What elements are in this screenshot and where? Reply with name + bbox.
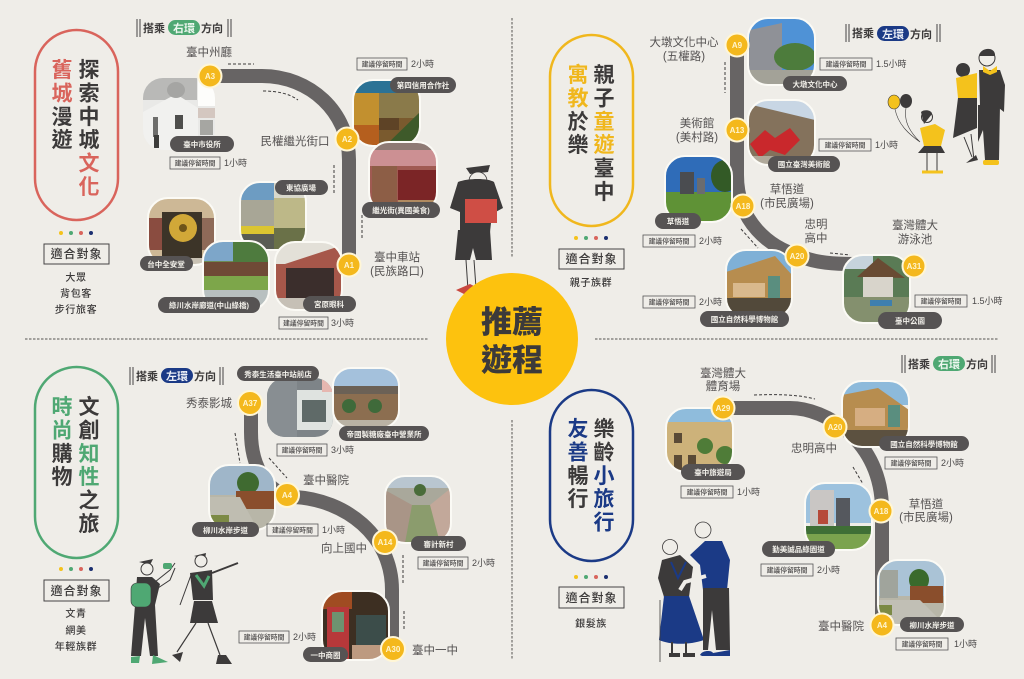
heading pill: 樂齡小旅行 友善暢行: 行 [568,488,588,511]
stay time tags: 2小時 [472,558,495,568]
heading pill: 探索中城文化 舊城漫遊: 城 [52,82,72,105]
stay time tags: 建議停留時間 [687,488,728,496]
station: A18 草悟道 [732,182,814,218]
stay time tags: 建議停留時間 [175,158,216,168]
audience block: 適合對象 [565,251,618,266]
stay time tags: 1小時 [875,140,898,150]
stay time tags: 建議停留時間 [283,318,324,328]
station: A9 大墩文化中心: 大墩文化中心 [650,35,719,49]
stay time tags: 建議停留時間 [921,296,962,306]
direction tag: left loop: 左環 [166,369,188,383]
stay time tags: 建議停留時間 [891,458,932,468]
heading pill: 文創知性之旅 時尚購物: 創 [78,419,100,442]
photo: 第四信用合作社: 第四信用合作社 [397,80,450,90]
center badge: 推薦遊程: 遊程 [481,343,543,378]
audience block [559,575,624,630]
photo: 柳川水岸步道: 柳川水岸步道 [203,525,248,535]
direction tag: right loop [137,19,231,37]
heading pill: 文創知性之旅 時尚購物: 文 [78,395,100,419]
station: A20 忠明高中: A20 [790,252,805,261]
station: A9 大墩文化中心: A9 [732,41,743,50]
photo: 國立臺灣美術館: 國立臺灣美術館 [778,159,831,169]
stay time tags: 2小時 [941,458,964,468]
audience block: 銀髮族 [575,617,607,630]
heading pill: 文創知性之旅 時尚購物: 知 [78,443,100,466]
audience block: 網美 [65,624,87,637]
audience block [559,236,624,289]
station: A13 美術館: (美村路) [676,130,718,144]
photo: 柳川水岸步道: 柳川水岸步道 [910,620,955,630]
heading pill: 親子童遊臺中 寓教於樂: 樂 [568,134,588,157]
route line [235,403,404,649]
station: A18 草悟道: 草悟道 [770,182,805,196]
stay time tags: 1小時 [954,639,977,649]
photo: 宮原眼科 [275,242,356,312]
photo: 臺中市役所 [143,78,234,152]
stay time tags: 建議停留時間 [649,236,690,246]
audience block: 適合對象 [50,246,103,261]
photo: 繼光街: 繼光街(異國美食) [372,205,430,215]
photo: 柳川水岸步道 [878,560,964,632]
heading pill: 樂齡小旅行 友善暢行: 小 [594,465,614,488]
station: A20 忠明高中: A20 [828,423,843,432]
photo: 繼光街 [362,142,440,218]
station: A31 臺灣體大游泳池: 臺灣體大 [892,218,938,232]
stay time tags: 建議停留時間 [282,446,323,454]
station: A1 臺中車站: 臺中車站 [374,250,420,264]
stay time tags [170,58,434,329]
photo: 綠川水岸廊道 [158,241,269,313]
station: A30 臺中一中: A30 [386,645,401,654]
stay time tags [681,457,977,650]
station: A20 忠明高中 [791,416,846,455]
heading pill: 文創知性之旅 時尚購物: 之 [78,489,100,513]
photo: 臺中公園 [843,255,942,329]
station: A13 美術館 [676,116,748,144]
station: A18 草悟道: (市民廣場) [899,510,953,524]
station: A9 大墩文化中心 [650,34,748,63]
photo: 臺中市役所: 臺中市役所 [183,139,221,149]
heading pill: 探索中城文化 舊城漫遊: 中 [78,106,100,129]
photo: 勤美誠品綠園道 [762,483,872,557]
direction tag: left loop: 搭乘 [136,369,158,383]
station: A14 向上國中: 向上國中 [321,541,367,555]
heading pill: 文創知性之旅 時尚購物: 時 [52,396,72,419]
direction tag: left loop: 搭乘 [852,26,874,40]
station: A13 美術館: A13 [730,126,745,135]
station: A2 民權繼光街口: A2 [342,135,353,144]
station: A1 臺中車站: A1 [344,261,355,270]
direction tag: right loop [902,355,995,373]
station: A18 草悟道: A18 [736,202,751,211]
audience block: 步行旅客 [55,303,97,316]
photo: 秀泰生活 [237,366,333,437]
direction tag: right loop: 方向 [201,21,223,35]
illustration: family with balloons [888,49,1005,172]
stay time tags: 2小時 [293,632,316,642]
station: A30 臺中一中 [381,637,458,661]
stay time tags: 3小時 [331,445,354,455]
station: A1 臺中車站: (民族路口) [370,264,424,278]
station: A3 臺中州廳 [186,45,232,88]
heading pill: 樂齡小旅行 友善暢行: 善 [568,441,588,464]
stay time tags: 建議停留時間 [362,60,403,68]
heading pill: 樂齡小旅行 友善暢行: 暢 [568,464,588,488]
audience block [44,567,109,653]
stay time tags: 1小時 [322,525,345,535]
photo: 國立自然科學博物館 [842,381,969,451]
heading pill: 探索中城文化 舊城漫遊 [35,30,118,220]
photo: 柳川水岸步道 [192,465,275,537]
photo: 東協廣場 [240,180,328,250]
stay time tags: 3小時 [331,318,354,328]
photo: 帝國製糖廠: 帝國製糖廠臺中營業所 [346,429,422,439]
direction tag: right loop: 搭乘 [908,357,930,371]
heading pill: 樂齡小旅行 友善暢行 [550,390,633,561]
audience block: 適合對象 [50,583,103,598]
photo: 國立自然科學博物館: 國立自然科學博物館 [711,314,779,324]
station: A31 臺灣體大游泳池: A31 [907,262,922,271]
photo: 臺中旅遊局: 臺中旅遊局 [694,467,732,477]
stay time tags: 1小時 [224,158,247,168]
panel: culture and shopping route [35,366,495,664]
stay time tags: 1.5小時 [876,59,907,69]
stay time tags: 建議停留時間 [244,632,285,642]
stay time tags: 2小時 [411,59,434,69]
audience block: 親子族群 [570,276,612,289]
direction tag: left loop: 左環 [882,27,904,41]
photo: 第四信用合作社 [353,77,456,146]
illustration: two travellers taking photos [131,553,238,664]
heading pill: 探索中城文化 舊城漫遊: 化 [78,176,100,199]
photo: 東協廣場: 東協廣場 [286,182,316,192]
photo: 國立自然科學博物館 [700,250,792,327]
stay time tags [643,58,1003,308]
photo: 草悟道: 草悟道 [667,216,690,226]
heading pill: 樂齡小旅行 友善暢行: 友 [568,418,588,441]
station: A3 臺中州廳: A3 [205,72,216,81]
heading pill: 文創知性之旅 時尚購物: 旅 [78,513,100,536]
photo: 草悟道 [655,156,739,229]
station: A18 草悟道: 草悟道 [909,497,944,511]
stay time tags: 建議停留時間 [423,558,464,568]
station: A9 大墩文化中心: (五權路) [663,49,705,63]
direction tag: right loop: 方向 [966,357,988,371]
station: A3 臺中州廳: 臺中州廳 [186,45,232,59]
station: A18 草悟道: (市民廣場) [760,196,814,210]
station: A29 臺灣體大體育場: 體育場 [706,379,741,393]
heading pill: 親子童遊臺中 寓教於樂: 遊 [594,133,614,157]
station: A29 臺灣體大體育場 [700,366,746,420]
heading pill: 文創知性之旅 時尚購物: 物 [52,466,72,489]
route line [216,64,362,262]
heading pill: 樂齡小旅行 友善暢行: 行 [594,512,614,535]
center badge: 推薦遊程: 推薦 [481,305,543,340]
station: A29 臺灣體大體育場: 臺灣體大 [700,366,746,380]
photo: 審計新村: 審計新村 [424,539,454,549]
heading pill: 探索中城文化 舊城漫遊: 漫 [52,106,72,129]
stay time tags: 2小時 [817,565,840,575]
panel: family route [550,18,1005,329]
station: A37 秀泰影城: A37 [243,399,258,408]
heading pill: 親子童遊臺中 寓教於樂: 親 [594,64,614,87]
photo: 秀泰生活: 秀泰生活臺中站前店 [244,369,312,379]
stay time tags: 建議停留時間 [825,140,866,150]
stay time tags: 建議停留時間 [649,298,690,306]
illustration: man reading map [450,165,503,295]
photo: 帝國製糖廠 [333,368,429,441]
station: A4 臺中醫院: A4 [877,621,888,630]
photo: 一中商圈: 一中商圈 [310,650,340,660]
heading pill: 親子童遊臺中 寓教於樂 [550,35,633,226]
photo: 臺中公園: 臺中公園 [895,316,925,326]
direction tag: left loop: 方向 [910,27,932,41]
stay time tags: 建議停留時間 [272,526,313,534]
station: A20 忠明高中: 忠明高中 [791,441,837,455]
heading pill: 樂齡小旅行 友善暢行: 樂 [594,418,614,441]
heading pill: 文創知性之旅 時尚購物: 尚 [52,419,72,442]
station: A13 美術館: 美術館 [680,116,714,130]
direction tag: right loop: 右環 [938,357,960,371]
heading pill: 探索中城文化 舊城漫遊: 遊 [52,128,72,152]
illustration: elderly couple [658,522,730,662]
audience block: 文青 [65,607,87,620]
heading pill: 文創知性之旅 時尚購物 [35,367,118,558]
station: A4 臺中醫院: A4 [282,491,293,500]
station: A37 秀泰影城 [186,391,262,415]
station: A2 民權繼光街口 [260,128,358,150]
photo: 審計新村 [385,476,466,551]
heading pill: 探索中城文化 舊城漫遊: 城 [78,129,100,152]
heading pill: 文創知性之旅 時尚購物: 性 [78,466,100,489]
heading pill: 親子童遊臺中 寓教於樂: 於 [568,111,588,134]
photo: 大墩文化中心: 大墩文化中心 [792,79,838,89]
direction tag: left loop: 方向 [194,369,216,383]
photo: 宮原眼科: 宮原眼科 [314,299,344,309]
station: A31 臺灣體大游泳池: 游泳池 [898,232,933,246]
center badge: 推薦遊程 [446,273,578,405]
station: A4 臺中醫院 [275,473,349,507]
heading pill: 親子童遊臺中 寓教於樂: 子 [594,87,614,110]
panel: old city route [35,19,503,329]
station: A2 民權繼光街口: 民權繼光街口 [260,134,330,148]
station: A30 臺中一中: 臺中一中 [412,643,458,657]
photo: 大墩文化中心 [748,18,847,91]
direction tag: right loop: 搭乘 [143,21,165,35]
stay time tags: 2小時 [699,236,722,246]
stay time tags: 建議停留時間 [902,640,943,648]
station: A14 向上國中 [321,530,397,555]
station: A20 忠明高中 [786,218,828,268]
direction tag: left loop [130,367,223,385]
station: A4 臺中醫院 [818,614,894,636]
audience block: 適合對象 [565,590,618,605]
route line [725,45,855,264]
direction tag: left loop [846,24,940,42]
photo: 綠川水岸廊道: 綠川水岸廊道(中山綠橋) [169,300,249,310]
heading pill: 探索中城文化 舊城漫遊: 舊 [52,59,72,82]
audience block: 背包客 [60,287,92,300]
heading pill: 文創知性之旅 時尚購物: 購 [52,443,72,466]
photo: 一中商圈 [303,591,389,662]
station: A4 臺中醫院: 臺中醫院 [818,619,864,633]
station: A37 秀泰影城: 秀泰影城 [186,396,232,410]
heading pill: 探索中城文化 舊城漫遊: 索 [78,82,100,105]
heading pill: 探索中城文化 舊城漫遊: 探 [78,59,100,82]
stay time tags: 建議停留時間 [767,566,808,574]
photo: 勤美誠品綠園道: 勤美誠品綠園道 [772,544,825,554]
station: A1 臺中車站 [338,250,424,278]
heading pill: 親子童遊臺中 寓教於樂: 臺 [594,158,614,181]
stay time tags: 1小時 [737,487,760,497]
stay time tags: 1.5小時 [972,296,1003,306]
audience block: 大眾 [65,271,87,284]
heading pill: 探索中城文化 舊城漫遊: 文 [78,152,100,176]
station: A18 草悟道 [870,497,953,524]
heading pill: 樂齡小旅行 友善暢行: 旅 [594,488,614,511]
direction tag: right loop: 右環 [173,21,195,35]
station: A4 臺中醫院: 臺中醫院 [303,473,349,487]
station: A20 忠明高中: 忠明 [804,218,828,231]
photo: 台中全安堂: 台中全安堂 [147,259,185,269]
heading pill: 親子童遊臺中 寓教於樂: 中 [594,181,614,204]
stay time tags: 建議停留時間 [826,60,867,68]
audience block [44,231,109,316]
station: A18 草悟道: A18 [874,507,889,516]
heading pill: 親子童遊臺中 寓教於樂: 寓 [568,63,588,87]
heading pill: 親子童遊臺中 寓教於樂: 教 [568,87,588,110]
photo: 國立臺灣美術館 [748,100,840,172]
heading pill: 樂齡小旅行 友善暢行: 齡 [594,441,614,464]
heading pill: 親子童遊臺中 寓教於樂: 童 [594,111,614,134]
station: A20 忠明高中: 高中 [804,231,828,245]
panel: senior friendly route [550,355,995,662]
stay time tags: 2小時 [699,297,722,307]
station: A29 臺灣體大體育場: A29 [716,404,731,413]
audience block: 年輕族群 [55,640,97,653]
station: A14 向上國中: A14 [378,538,393,547]
photo: 台中全安堂 [140,198,215,271]
stay time tags [239,444,495,643]
route line [723,395,882,625]
station: A31 臺灣體大游泳池 [892,218,938,278]
photo: 臺中旅遊局 [666,408,745,480]
photo: 國立自然科學博物館: 國立自然科學博物館 [890,439,958,449]
